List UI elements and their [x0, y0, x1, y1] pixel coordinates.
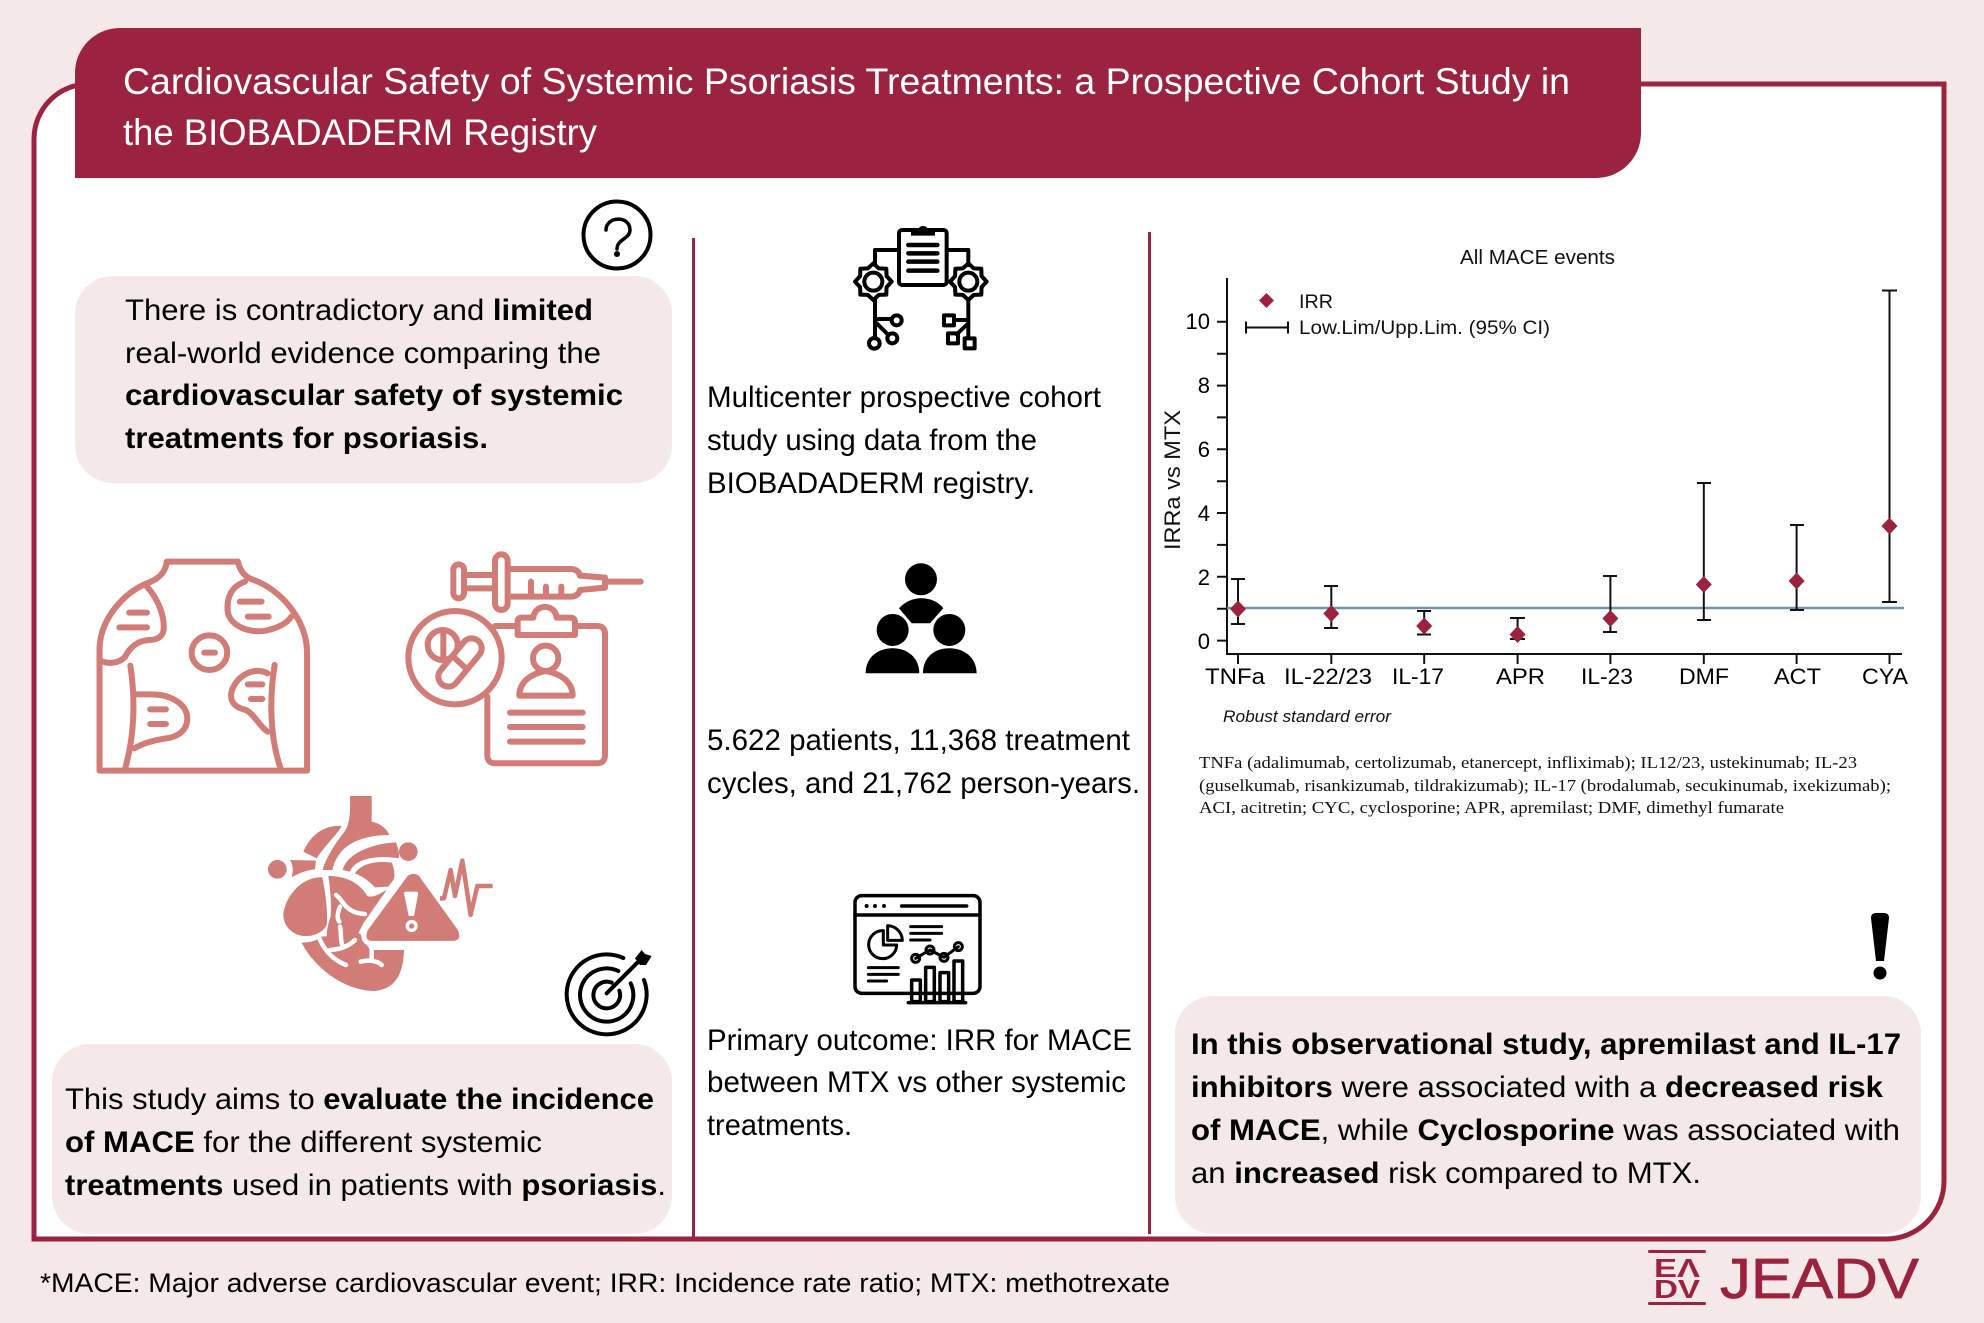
panel: background statement [75, 276, 672, 483]
chart footnote: (guselkumab, risankizumab, tildrakizumab); IL-17 (brodalumab, secukinumab, ixekizumab); [1199, 776, 1891, 795]
chart footnote: TNFa (adalimumab, certolizumab, etanercept, infliximab); IL12/23, ustekinumab; IL-23 [1199, 753, 1857, 772]
panel: conclusion: inhibitors were associated with a decreased risk [1191, 1071, 1883, 1104]
x axis labels [1205, 664, 1908, 689]
panel: study aim: of MACE for the different systemic [65, 1126, 542, 1159]
x axis labels: CYA [1862, 664, 1908, 689]
x axis labels: IL-23 [1581, 664, 1633, 689]
title banner: the BIOBADADERM Registry [123, 112, 597, 153]
text: study design: Multicenter prospective cohort [707, 381, 1102, 414]
IRR markers [1230, 518, 1898, 643]
text: primary outcome: Primary outcome: IRR for MACE [707, 1024, 1132, 1057]
panel: conclusion: of MACE, while Cyclosporine was associated with [1191, 1114, 1900, 1147]
y axis labels: 2 [1198, 565, 1210, 590]
column divider left [692, 238, 695, 1237]
chart: IRR vs MTX by treatment [1160, 247, 1908, 817]
panel: conclusion: an increased risk compared to MTX. [1191, 1157, 1701, 1190]
text: study design: BIOBADADERM registry. [707, 467, 1035, 500]
text: study population: 5.622 patients, 11,368 treatment [707, 724, 1131, 757]
footnote: abbreviations: *MACE: Major adverse cardiovascular event; IRR: Incidence rate ratio; MTX: methotrexate [40, 1268, 1170, 1298]
logo: JEADV: DV [1654, 1274, 1701, 1304]
y axis labels: 4 [1198, 501, 1210, 526]
legend [1246, 292, 1550, 339]
chart footnote: ACI, acitretin; CYC, cyclosporine; APR, apremilast; DMF, dimethyl fumarate [1199, 798, 1784, 817]
y axis labels: 0 [1198, 629, 1210, 654]
panel: background statement: treatments for psoriasis. [125, 422, 488, 455]
icon: question mark [584, 202, 650, 268]
legend: IRR [1299, 292, 1333, 313]
panel: conclusion: In this observational study, apremilast and IL-17 [1191, 1028, 1901, 1061]
panel: background statement: cardiovascular safety of systemic [125, 379, 623, 412]
logo: JEADV [1648, 1247, 1919, 1311]
icon: syringe, pills and patient record [408, 554, 641, 763]
text: study design: study using data from the [707, 424, 1037, 457]
icon: group of people [866, 563, 977, 673]
logo: JEADV: JEADV [1720, 1247, 1919, 1311]
title banner: Cardiovascular Safety of Systemic Psoriasis Treatments: a Prospective Cohort Study in [123, 61, 1570, 102]
panel: study aim: This study aims to evaluate the incidence [65, 1083, 654, 1116]
x axis labels: ACT [1774, 664, 1821, 689]
title banner [75, 28, 1641, 178]
error bars [1231, 290, 1897, 639]
text: primary outcome [707, 1024, 1132, 1142]
panel: background statement: There is contradictory and limited [125, 294, 593, 327]
legend: Low.Lim/Upp.Lim. (95% CI) [1299, 318, 1550, 339]
x axis labels: APR [1496, 664, 1545, 689]
text: study design [707, 381, 1102, 500]
panel: conclusion [1175, 996, 1921, 1234]
chart title: All MACE events [1460, 247, 1615, 269]
text: study population: cycles, and 21,762 person-years. [707, 767, 1140, 800]
x axis labels: IL-22/23 [1284, 664, 1372, 689]
icon: clipboard with gears and branches [855, 226, 987, 349]
icon: analytics dashboard [855, 896, 980, 1003]
y axis labels [1186, 309, 1210, 654]
logo: JEADV: EΛ [1654, 1253, 1701, 1283]
panel: background statement: real-world evidence comparing the [125, 337, 601, 370]
x axis labels: TNFa [1205, 664, 1266, 689]
panel: study aim: treatments used in patients with psoriasis. [65, 1169, 666, 1202]
icon: exclamation mark [1871, 913, 1889, 980]
icon: heart with warning triangle [268, 796, 493, 991]
chart footnote [1199, 753, 1891, 817]
x axis labels: IL-17 [1392, 664, 1444, 689]
y axis labels: 6 [1198, 437, 1210, 462]
axes and ticks [1217, 278, 1902, 664]
x axis labels: DMF [1679, 664, 1729, 689]
y axis labels: 10 [1186, 309, 1210, 334]
text: primary outcome: treatments. [707, 1109, 852, 1142]
y axis labels: 8 [1198, 373, 1210, 398]
y axis title: IRRa vs MTX [1160, 410, 1185, 550]
column divider right [1148, 232, 1151, 1234]
panel: study aim [52, 1044, 672, 1234]
icon: target with arrow [567, 950, 652, 1034]
text: study population [707, 724, 1140, 800]
chart note: Robust standard error [1223, 707, 1392, 726]
icon: torso with psoriasis plaques [100, 562, 307, 771]
text: primary outcome: between MTX vs other systemic [707, 1066, 1126, 1099]
reference line at 1 [1227, 607, 1904, 609]
